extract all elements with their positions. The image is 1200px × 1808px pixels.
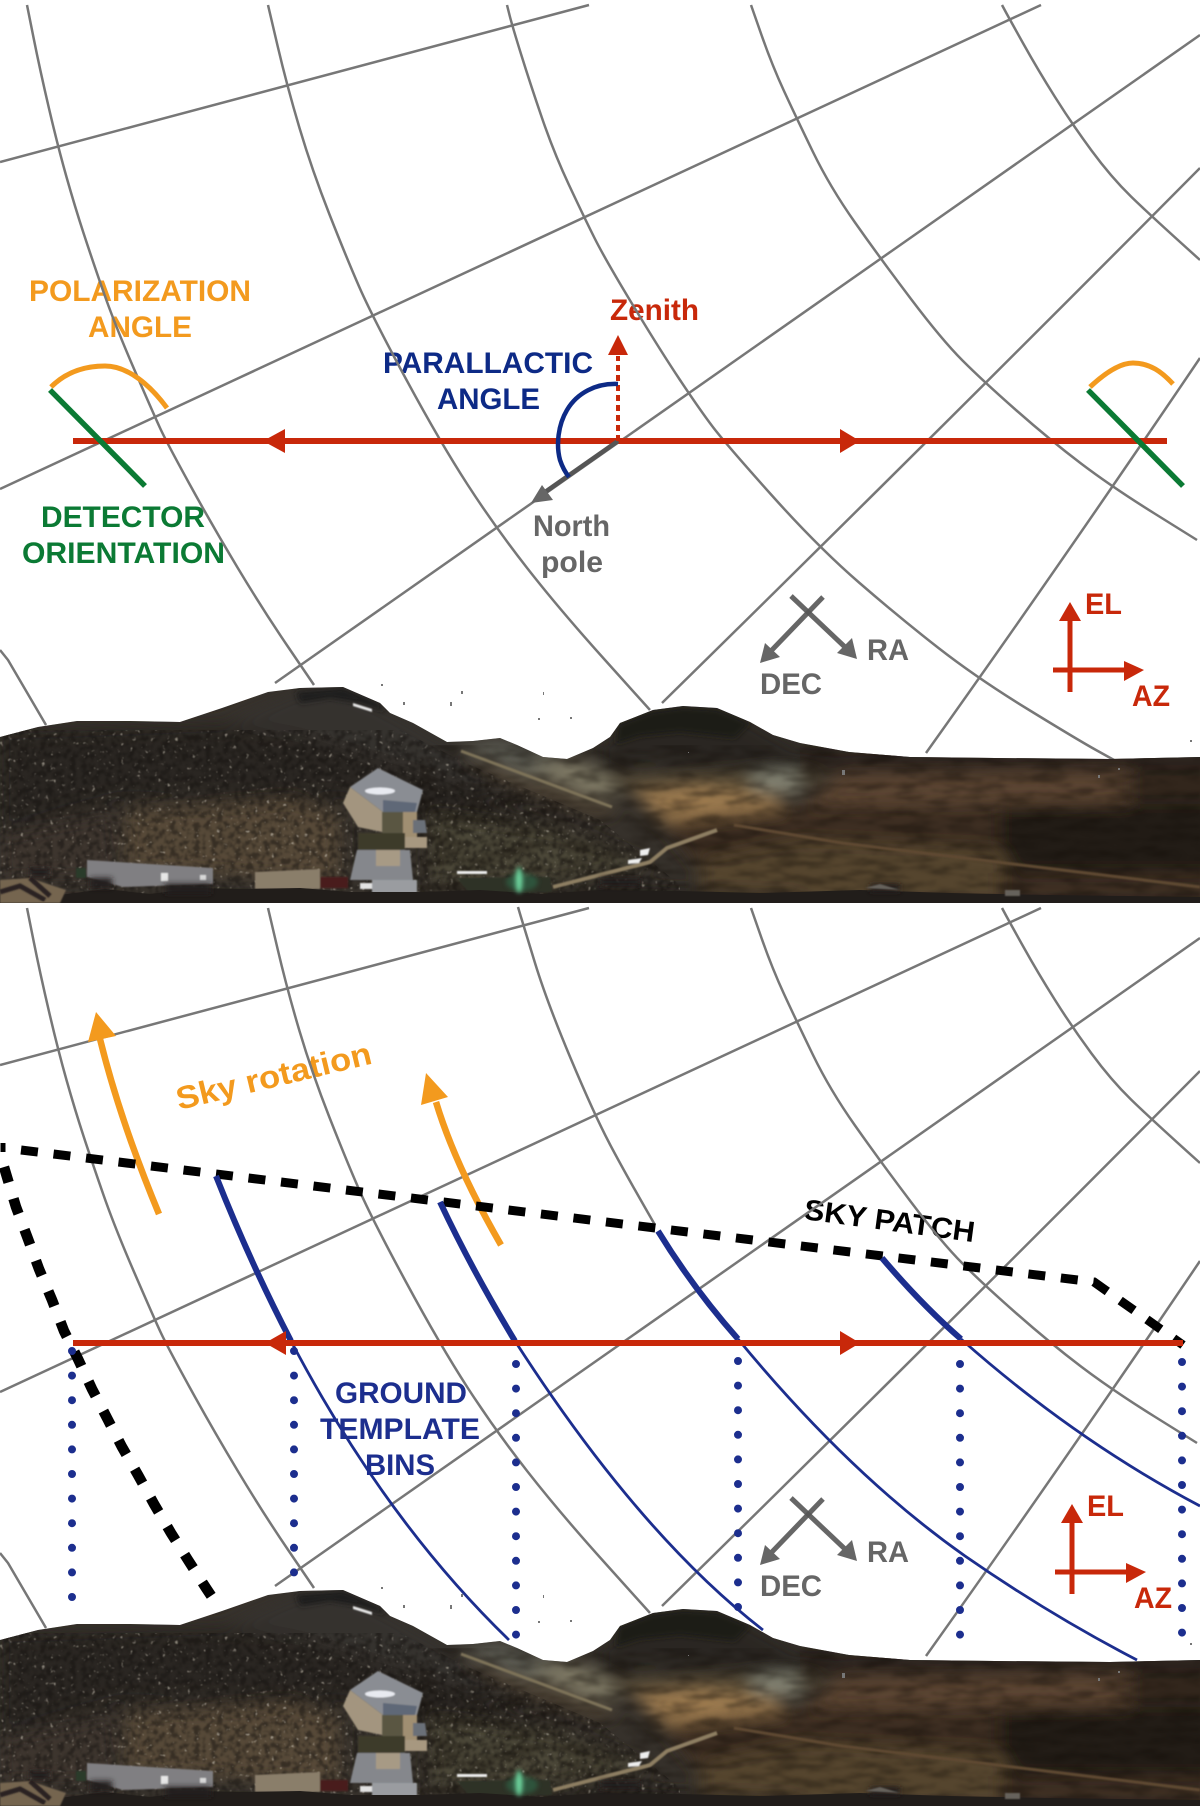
arrow: sky rotation right xyxy=(421,1073,501,1245)
photo: mountains and telescope, bottom panel xyxy=(0,1583,1200,1808)
ground template bins: dotted vertical lines xyxy=(72,1351,1182,1638)
ground template bins: solid blue curves xyxy=(216,1176,1200,1660)
compass: RA and DEC, bottom panel xyxy=(760,1498,909,1603)
label: ground template bins: TEMPLATE xyxy=(320,1413,480,1446)
label: ground template bins: BINS xyxy=(365,1449,435,1482)
compass: RA and DEC, top panel: DEC xyxy=(760,668,822,701)
label: detector orientation: DETECTOR xyxy=(41,501,205,534)
label: sky patch: SKY PATCH xyxy=(802,1194,977,1249)
heading text: polarization angle xyxy=(29,275,251,344)
compass: EL and AZ, bottom panel xyxy=(1055,1490,1172,1615)
heading text: polarization angle: ANGLE xyxy=(88,311,192,344)
compass: RA and DEC, top panel xyxy=(760,596,909,701)
compass: EL and AZ, top panel xyxy=(1053,588,1170,713)
label: parallactic angle: PARALLACTIC xyxy=(383,347,593,380)
compass: EL and AZ, bottom panel: AZ xyxy=(1134,1582,1172,1615)
scan line with arrows: bottom panel xyxy=(73,1331,1183,1355)
arrow: north pole xyxy=(531,441,618,503)
arc: polarization angle right xyxy=(1090,363,1173,387)
scan line with arrows: top panel xyxy=(73,429,1167,453)
compass: RA and DEC, top panel: RA xyxy=(867,634,909,667)
sky coordinate grid: top panel xyxy=(0,5,1200,760)
label: north pole: North xyxy=(533,510,610,543)
arrow: sky rotation left xyxy=(88,1012,159,1214)
photo: mountains and telescope, top panel xyxy=(0,680,1200,905)
label: zenith: Zenith xyxy=(610,294,699,327)
label: parallactic angle xyxy=(383,347,593,416)
line: detector orientation left xyxy=(50,390,145,486)
arrow: zenith dotted xyxy=(608,335,628,441)
label: detector orientation: ORIENTATION xyxy=(22,537,225,570)
sky patch boundary: dashed xyxy=(3,1143,1183,1600)
compass: RA and DEC, bottom panel: DEC xyxy=(760,1570,822,1603)
heading text: polarization angle: POLARIZATION xyxy=(29,275,251,308)
compass: EL and AZ, top panel: AZ xyxy=(1132,680,1170,713)
arc: polarization angle left xyxy=(51,366,167,408)
arc: parallactic angle xyxy=(558,384,618,477)
compass: EL and AZ, top panel: EL xyxy=(1085,588,1122,621)
label: ground template bins xyxy=(320,1377,480,1482)
compass: EL and AZ, bottom panel: EL xyxy=(1087,1490,1124,1523)
label: ground template bins: GROUND xyxy=(335,1377,467,1410)
compass: RA and DEC, bottom panel: RA xyxy=(867,1536,909,1569)
label: north pole xyxy=(533,510,610,579)
line: detector orientation right xyxy=(1088,390,1183,486)
sky coordinate grid: bottom panel xyxy=(0,907,1200,1656)
label: parallactic angle: ANGLE xyxy=(437,383,540,416)
label: detector orientation xyxy=(22,501,225,570)
label: north pole: pole xyxy=(541,546,603,579)
label: sky rotation: Sky rotation xyxy=(172,1035,375,1117)
